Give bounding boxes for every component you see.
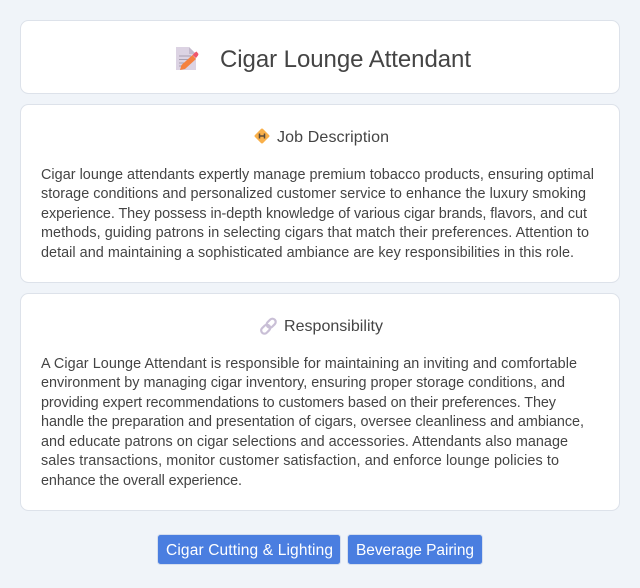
text block: job description: methods, guiding patrons in selecting cigars that match their preferences. Attention to: [41, 225, 589, 241]
heading: job description: Job Description: [277, 129, 389, 146]
heading: responsibility: Responsibility: [284, 318, 383, 335]
text block: responsibility: sales transactions, monitor customer satisfaction, and enforce lounge policies to: [41, 453, 559, 469]
icon: memo with pencil: [176, 47, 198, 70]
text block: responsibility: and educate patrons on cigar selections and accessories. Attendants also manage: [41, 434, 568, 450]
title: Cigar Lounge Attendant: [220, 46, 471, 73]
text block: responsibility: enhance the overall experience.: [41, 473, 242, 489]
text block: job description: detail and maintaining a sophisticated ambiance are key responsibilities in this role.: [41, 245, 574, 261]
panel: job description: [20, 104, 620, 282]
text block: job description: [41, 167, 594, 261]
text block: job description: storage conditions and personalized customer service to enhance the luxury smoking: [41, 186, 586, 202]
text block: responsibility: [41, 356, 584, 489]
panel: responsibility: [20, 294, 620, 510]
text block: job description: Cigar lounge attendants expertly manage premium tobacco products, ensuring optimal: [41, 167, 594, 183]
text block: responsibility: handle the preparation and presentation of cigars, oversee cleanliness and ambiance,: [41, 414, 584, 430]
icon: diamond road sign: [254, 128, 270, 144]
tag: beverage pairing: Beverage Pairing: [356, 542, 474, 559]
tag: cigar cutting and lighting: Cigar Cutting & Lighting: [166, 542, 333, 559]
icon: chain link: [260, 317, 277, 335]
text block: responsibility: environment by managing cigar inventory, ensuring proper storage conditions, and: [41, 375, 565, 391]
text block: responsibility: A Cigar Lounge Attendant is responsible for maintaining an inviting and comfortable: [41, 356, 577, 372]
text block: job description: experience. They possess in-depth knowledge of various cigar brands, flavors, and cut: [41, 206, 587, 222]
tag: cigar cutting and lighting: [158, 534, 340, 564]
text block: responsibility: providing expert recommendations to customers based on their preferences. They: [41, 395, 557, 411]
tag: beverage pairing: [348, 534, 482, 564]
panel: title header: [20, 20, 620, 94]
